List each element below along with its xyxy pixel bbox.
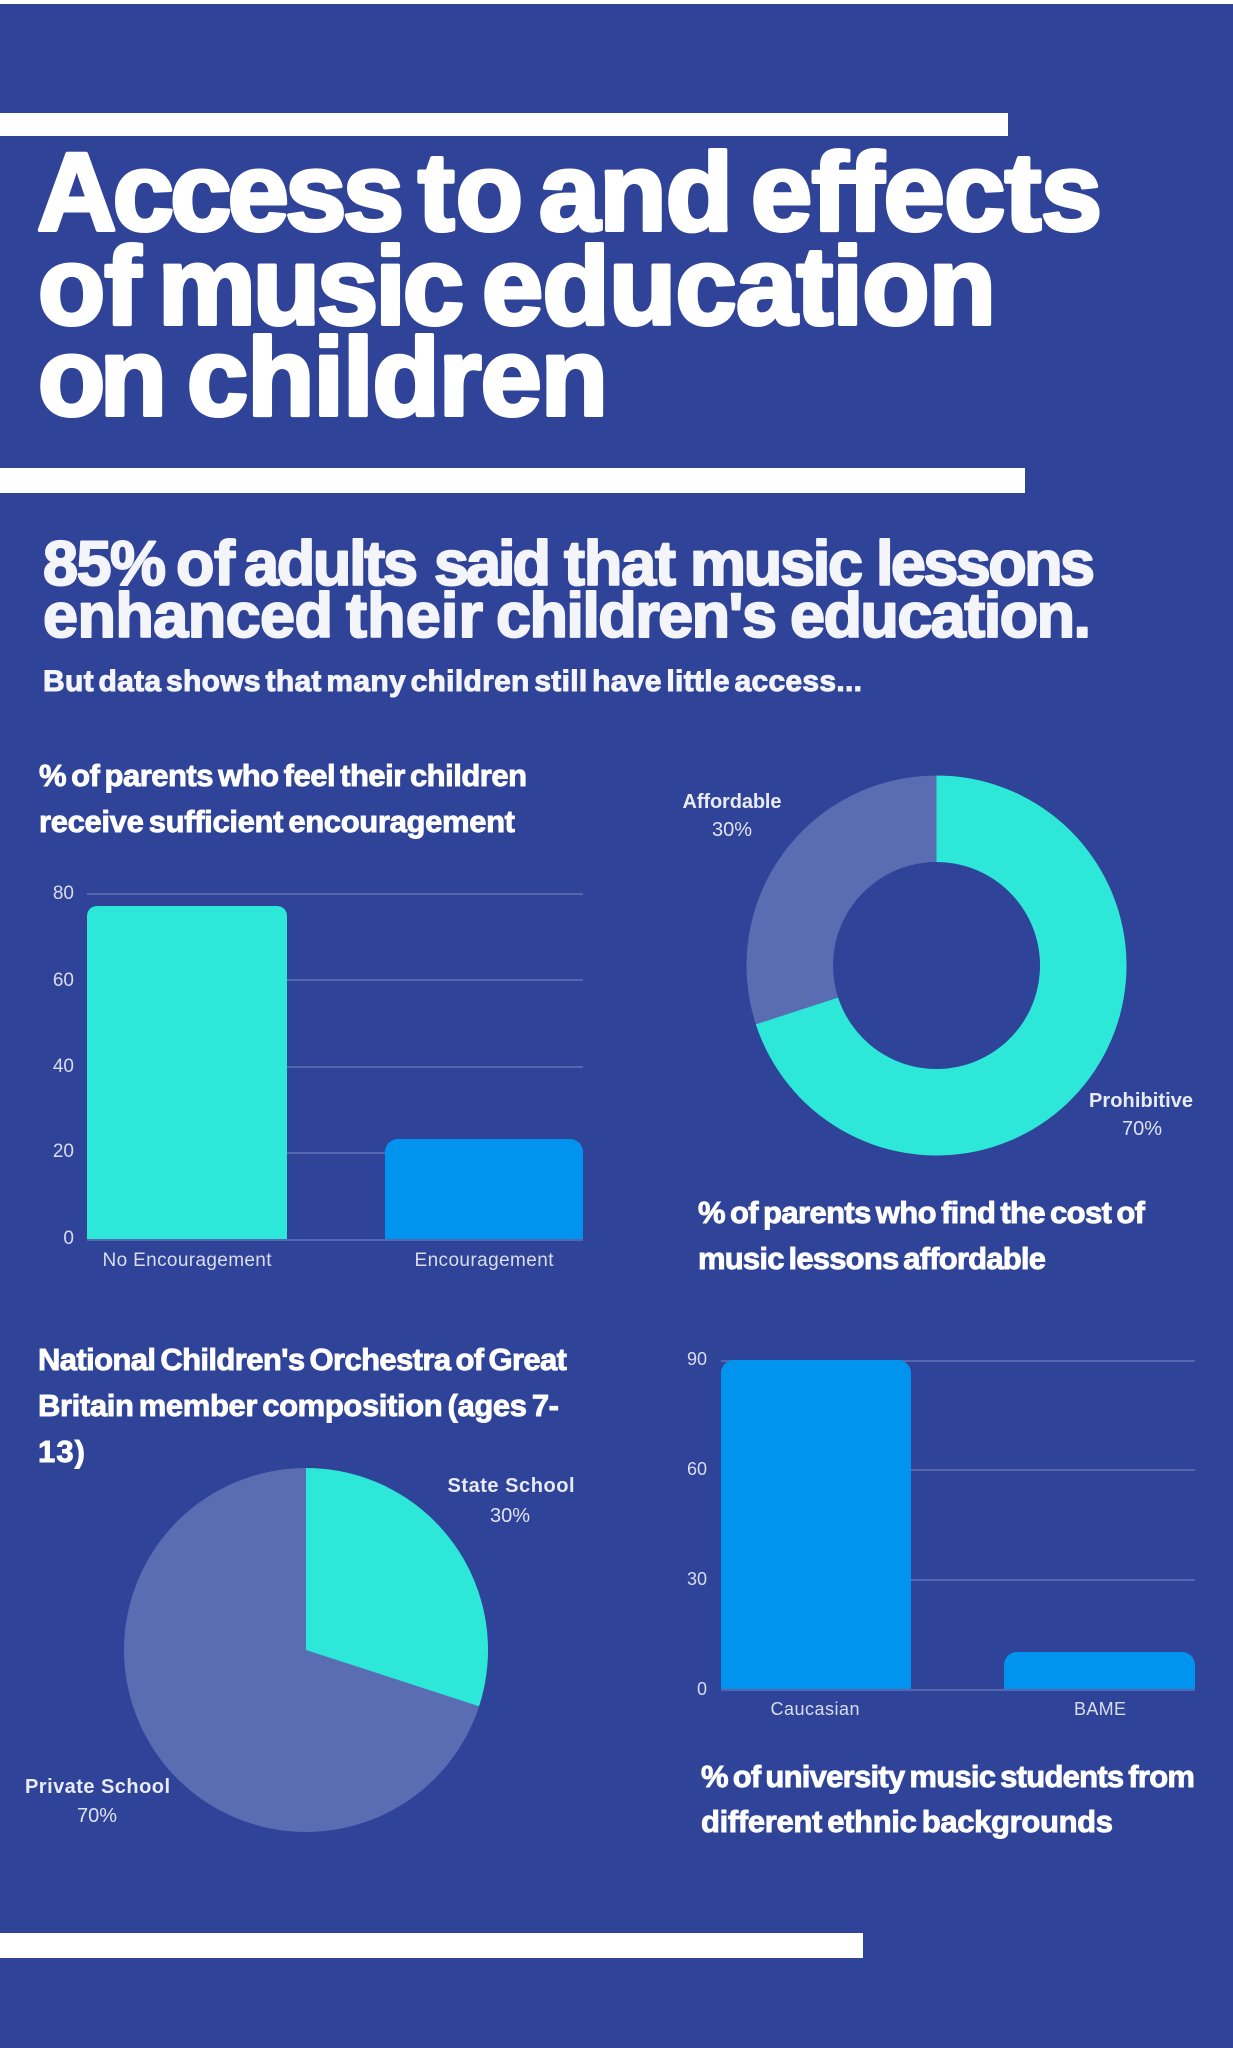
donut chart: cost of lessons: Affordable	[682, 791, 782, 813]
headline statistic: education.	[790, 581, 1091, 651]
title: and	[539, 131, 733, 254]
title: music	[158, 225, 464, 348]
bar chart: encouragement: 20	[53, 1141, 74, 1162]
heading: orchestra chart	[38, 1342, 567, 1469]
pie chart: orchestra composition	[25, 1468, 574, 1832]
title: effects	[751, 131, 1102, 254]
heading: orchestra chart: Britain member composition (ages 7-	[38, 1388, 559, 1423]
headline statistic: music	[690, 529, 863, 599]
pie chart: orchestra composition: 70%	[77, 1805, 117, 1827]
heading: orchestra chart: National Children's Orchestra of Great	[38, 1342, 567, 1377]
headline statistic: of	[176, 529, 236, 599]
heading: encouragement chart	[39, 758, 527, 839]
bar chart: encouragement: 80	[53, 883, 74, 904]
bar chart: encouragement: 40	[53, 1056, 74, 1077]
bar chart: encouragement: 60	[53, 970, 74, 991]
heading: ethnic backgrounds chart: % of university music students from	[701, 1759, 1195, 1794]
heading: cost chart: music lessons affordable	[698, 1241, 1046, 1276]
heading: ethnic backgrounds chart	[701, 1759, 1195, 1839]
donut chart: cost of lessons: 70%	[1122, 1118, 1162, 1140]
headline statistic: that	[564, 529, 676, 599]
sub-headline: But data shows that many children still have little access...	[43, 665, 862, 698]
title	[37, 131, 1102, 439]
headline statistic: lessons	[876, 529, 1095, 599]
headline statistic	[43, 529, 1095, 651]
headline statistic: adults	[244, 529, 418, 599]
heading: encouragement chart: receive sufficient encouragement	[39, 804, 515, 839]
headline statistic: 85%	[43, 529, 166, 599]
title: Access	[37, 131, 404, 254]
bar chart: encouragement: No Encouragement	[102, 1250, 272, 1271]
donut chart: cost of lessons: 30%	[712, 819, 752, 841]
heading: encouragement chart: % of parents who feel their children	[39, 758, 527, 793]
title: to	[418, 131, 523, 254]
heading: orchestra chart: 13)	[38, 1434, 85, 1469]
donut chart: cost of lessons	[682, 776, 1193, 1156]
bar chart: ethnic backgrounds: 60	[687, 1459, 707, 1479]
bottom white bar	[0, 1933, 863, 1958]
title: children	[187, 316, 608, 439]
title: education	[482, 225, 996, 348]
pie chart: orchestra composition: 30%	[490, 1505, 530, 1527]
bar chart: encouragement: 0	[63, 1228, 74, 1249]
pie chart: orchestra composition: State School	[448, 1475, 574, 1497]
heading: ethnic backgrounds chart: different ethnic backgrounds	[701, 1804, 1113, 1839]
bar chart: ethnic backgrounds	[687, 1349, 1195, 1719]
donut chart: cost of lessons: Prohibitive	[1089, 1090, 1193, 1112]
title: of	[38, 225, 141, 348]
headline statistic: their	[346, 581, 483, 651]
bar chart: ethnic backgrounds: 90	[687, 1349, 707, 1369]
top white bar	[0, 113, 1008, 136]
heading: cost chart: % of parents who find the cost of	[698, 1195, 1146, 1230]
bar chart: ethnic backgrounds: 30	[687, 1569, 707, 1589]
bar chart: ethnic backgrounds: BAME	[1074, 1699, 1126, 1719]
headline statistic: said	[434, 529, 551, 599]
bar chart: encouragement: Encouragement	[414, 1250, 554, 1271]
bar chart: ethnic backgrounds: Caucasian	[770, 1699, 860, 1719]
headline statistic: children's	[496, 581, 777, 651]
pie chart: orchestra composition: Private School	[25, 1776, 170, 1798]
headline statistic: enhanced	[43, 581, 333, 651]
second white bar	[0, 468, 1025, 493]
bar chart: encouragement	[53, 883, 583, 1271]
heading: cost chart	[698, 1195, 1146, 1276]
bar chart: ethnic backgrounds: 0	[697, 1679, 707, 1699]
title: on	[38, 316, 167, 439]
